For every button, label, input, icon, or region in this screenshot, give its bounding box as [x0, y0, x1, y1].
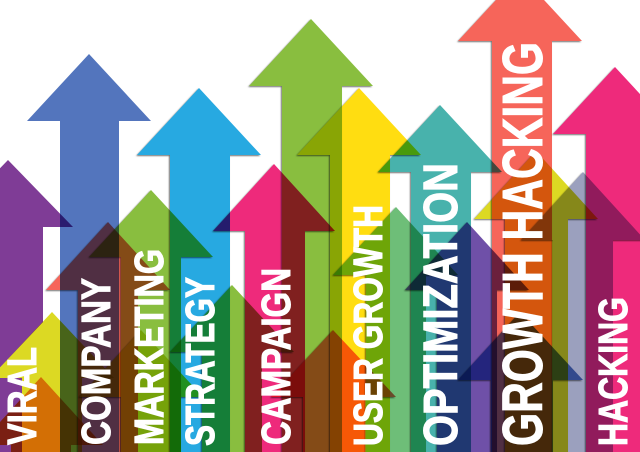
- label: company: COMPANY: [73, 278, 119, 445]
- arrow: growth hacking yellow: [474, 151, 598, 452]
- arrow: viral yellow: [0, 312, 114, 452]
- arrow: optimization teal: [378, 105, 502, 452]
- arrow: company blue: [27, 54, 151, 452]
- label: user growth: USER GROWTH: [345, 205, 391, 446]
- label: marketing: MARKETING: [126, 249, 172, 445]
- arrow: marketing yellow: [79, 330, 203, 452]
- label: optimization: OPTIMIZATION: [415, 163, 468, 446]
- label: strategy: STRATEGY: [177, 277, 223, 446]
- label: hacking: HACKING: [590, 297, 636, 446]
- arrow: campaign green: [249, 19, 373, 452]
- arrow: marketing green: [89, 190, 213, 452]
- arrow: company salmon: [46, 222, 170, 452]
- label: viral: VIRAL: [0, 347, 45, 445]
- arrow: user growth yellow: [297, 88, 421, 452]
- arrow: hacking lavender: [521, 172, 640, 452]
- arrow: growth hacking blue: [458, 312, 583, 452]
- arrow: campaign pink: [213, 164, 335, 452]
- label: campaign: CAMPAIGN: [253, 268, 299, 445]
- arrow: optimization light green: [333, 207, 458, 452]
- arrow: viral orange: [0, 377, 103, 452]
- arrow: strategy green: [170, 285, 294, 452]
- arrow: optimization purple: [405, 222, 529, 452]
- arrow: growth hacking salmon: [458, 0, 582, 452]
- arrow: hacking pink: [553, 67, 640, 452]
- arrow: strategy cyan: [137, 88, 261, 452]
- arrow: user growth salmon: [271, 330, 396, 452]
- arrow: viral purple: [0, 160, 73, 452]
